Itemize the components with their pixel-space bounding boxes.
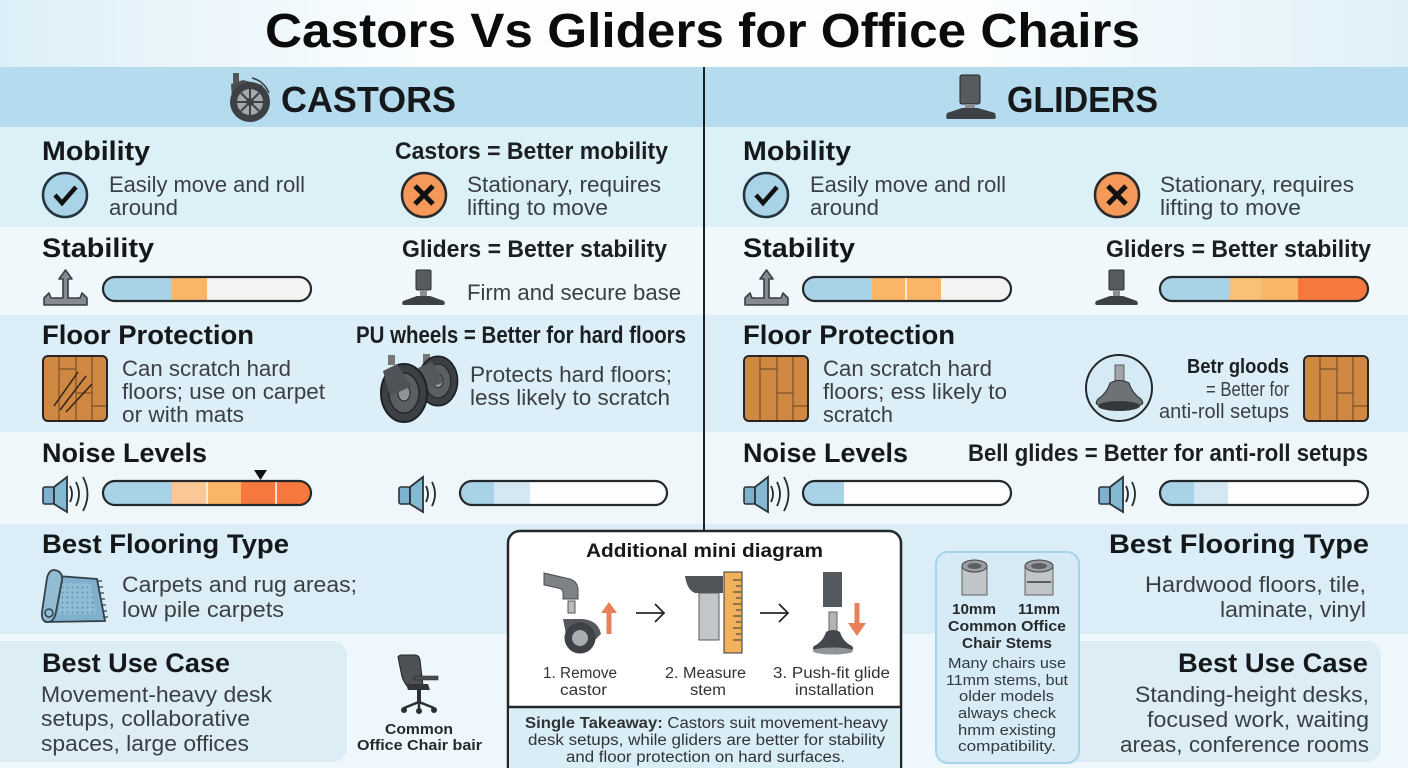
noise bar: [803, 481, 1011, 505]
icon: bell glide: [1086, 355, 1152, 421]
arrow: [760, 604, 788, 622]
noise levels row: Noise Levels: [743, 438, 908, 468]
best use case: Movement-heavy desk: [41, 682, 273, 707]
floor protection row: = Better for: [1206, 379, 1289, 401]
mobility row: [42, 136, 669, 220]
noise levels row: Bell glides = Better for anti-roll setups: [968, 440, 1368, 467]
icon: 11mm stem: [1025, 560, 1053, 595]
icon: measure stem: [685, 572, 742, 653]
panel: gliders: [508, 75, 1381, 768]
icon: push-fit glide: [813, 572, 866, 654]
stability row: Gliders = Better stability: [402, 236, 668, 263]
best flooring type: Best Flooring Type: [42, 529, 289, 559]
quiet noise bar: [1160, 481, 1368, 505]
noise levels row: [743, 438, 1368, 512]
best use case: Standing-height desks,: [1135, 682, 1369, 707]
floor protection row: Protects hard floors;: [470, 362, 672, 387]
mobility row: [743, 136, 1354, 220]
stability row: Stability: [42, 233, 154, 263]
castors header: [230, 73, 456, 122]
mobility row: Stationary, requires: [1160, 172, 1354, 197]
best use case: Best Use Case: [42, 648, 230, 678]
floor protection row: Floor Protection: [743, 320, 955, 350]
quiet noise bar: [460, 481, 667, 505]
gliders header: GLIDERS: [1007, 79, 1158, 120]
icon: cross: [1095, 173, 1139, 217]
mobility row: Mobility: [743, 136, 851, 166]
best use case: [1040, 641, 1381, 762]
best flooring type: Carpets and rug areas;: [122, 572, 357, 597]
step labels: 2. Measure: [665, 665, 746, 682]
single takeaway: and floor protection on hard surfaces.: [566, 749, 845, 766]
panel: stem sizes: hmm existing: [958, 723, 1056, 739]
stability row: Gliders = Better stability: [1106, 236, 1372, 263]
floor protection row: [743, 320, 1368, 427]
floor protection row: less likely to scratch: [470, 385, 670, 410]
title: Castors Vs Gliders for Office Chairs: [265, 5, 1140, 58]
panel: stem sizes: Chair Stems: [962, 636, 1052, 652]
floor protection row: [42, 320, 686, 427]
chair caption: Common: [385, 722, 453, 738]
panel: stem sizes: 10mm: [952, 602, 996, 618]
best flooring type: low pile carpets: [122, 597, 284, 622]
icon: castor wheel: [230, 73, 270, 122]
mobility row: Castors = Better mobility: [395, 138, 669, 165]
icon: wood floor: [1304, 356, 1368, 421]
mobility row: Easily move and roll: [810, 172, 1006, 197]
icon: scratched wood: [43, 356, 107, 421]
mobility row: lifting to move: [1160, 195, 1301, 220]
mobility row: Easily move and roll: [109, 172, 305, 197]
floor protection row: floors; ess likely to: [823, 379, 1007, 404]
icon: remove castor: [544, 573, 617, 654]
panel: stem sizes: 11mm stems, but: [946, 673, 1068, 689]
takeaway background: [509, 707, 900, 768]
icon: glider large: [946, 75, 996, 119]
icon: quiet speaker: [1099, 477, 1135, 512]
best flooring type: Best Flooring Type: [1109, 529, 1369, 559]
stability bar: [103, 277, 311, 301]
best flooring type: [1109, 529, 1369, 622]
icon: loud speaker: [744, 477, 788, 512]
best flooring type: [42, 529, 357, 622]
step labels: 1. Remove: [543, 665, 617, 682]
step labels: castor: [560, 682, 607, 699]
noise levels row: Noise Levels: [42, 438, 207, 468]
best use case: setups, collaborative: [41, 706, 250, 731]
floor protection row: Betr gloods: [1187, 356, 1289, 378]
icon: quiet speaker: [399, 477, 435, 512]
stability row: [743, 233, 1372, 305]
mobility row: Mobility: [42, 136, 150, 166]
panel: stem sizes: 11mm: [1018, 602, 1060, 618]
panel: stem sizes: [936, 552, 1079, 763]
icon: check: [744, 173, 788, 217]
floor protection row: or with mats: [122, 402, 244, 427]
floor protection row: floors; use on carpet: [122, 379, 325, 404]
best use case: Best Use Case: [1178, 648, 1368, 678]
floor protection row: Can scratch hard: [823, 356, 992, 381]
icon: 10mm stem: [962, 560, 987, 595]
arrow: [636, 604, 664, 622]
stability bar high: [1160, 277, 1368, 301]
icon: check: [43, 173, 87, 217]
single takeaway: Single Takeaway: Castors suit movement-heavy: [525, 715, 888, 732]
panel: castors: [0, 73, 686, 762]
noise bar: [103, 470, 311, 505]
floor protection row: Can scratch hard: [122, 356, 291, 381]
step labels: installation: [795, 682, 874, 699]
stability bar: [803, 277, 1011, 301]
panel: mini diagram: [508, 531, 901, 768]
icon: glider: [402, 270, 445, 305]
stability row: Firm and secure base: [467, 280, 681, 305]
centre divider: [703, 67, 705, 532]
stability row: [42, 233, 681, 305]
panel: stem sizes: older models: [959, 689, 1054, 705]
icon: cross: [402, 173, 446, 217]
icon: office chair: [398, 655, 438, 714]
step labels: [543, 665, 890, 699]
mobility row: around: [810, 195, 879, 220]
stability row: Stability: [743, 233, 855, 263]
noise levels row: [42, 438, 667, 512]
best use case: areas, conference rooms: [1120, 732, 1369, 757]
floor protection row: anti-roll setups: [1159, 401, 1289, 423]
best use case: focused work, waiting: [1147, 707, 1369, 732]
mini diagram heading: Additional mini diagram: [586, 541, 823, 562]
castors header: CASTORS: [281, 79, 456, 120]
chair caption: [357, 722, 482, 754]
single takeaway: desk setups, while gliders are better for stability: [528, 732, 885, 749]
mobility row: around: [109, 195, 178, 220]
gliders header: [946, 75, 1158, 120]
icon: upward base: [44, 270, 87, 305]
icon: upward base: [745, 270, 788, 305]
mobility row: Stationary, requires: [467, 172, 661, 197]
best flooring type: Hardwood floors, tile,: [1145, 572, 1366, 597]
floor protection row: PU wheels = Better for hard floors: [356, 322, 686, 349]
panel: stem sizes: compatibility.: [958, 739, 1056, 755]
icon: rug: [42, 570, 108, 622]
step labels: stem: [690, 682, 726, 699]
panel: stem sizes: always check: [958, 706, 1057, 722]
icon: wood floor: [744, 356, 808, 421]
icon: PU wheels: [381, 354, 458, 422]
step labels: 3. Push-fit glide: [773, 665, 890, 682]
panel: stem sizes: Common Office: [948, 619, 1066, 635]
best flooring type: laminate, vinyl: [1220, 597, 1366, 622]
best use case: [0, 641, 347, 762]
floor protection row: Floor Protection: [42, 320, 254, 350]
icon: loud speaker: [43, 477, 88, 512]
mobility row: lifting to move: [467, 195, 608, 220]
icon: glider: [1095, 270, 1138, 305]
single takeaway: [525, 715, 888, 766]
floor protection row: scratch: [823, 402, 893, 427]
best use case: spaces, large offices: [41, 731, 249, 756]
chair caption: Office Chair bair: [357, 738, 482, 754]
panel: stem sizes: Many chairs use: [948, 656, 1066, 672]
title: [0, 0, 1408, 67]
